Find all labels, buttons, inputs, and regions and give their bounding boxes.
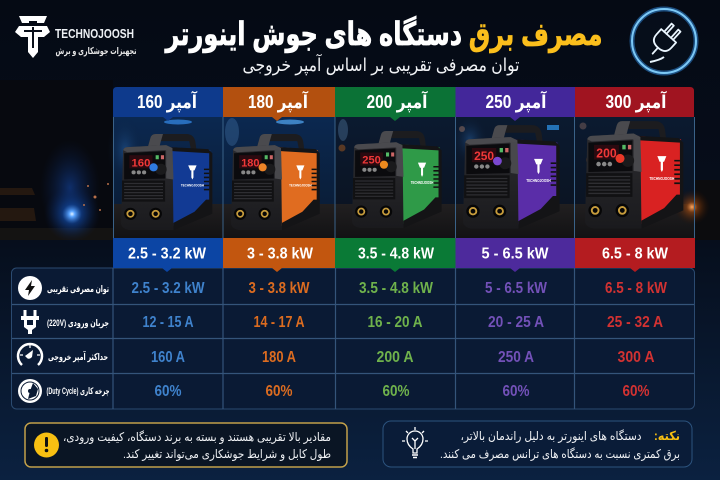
- values: 180 A: 180 A: [262, 349, 296, 366]
- values: 250 A: [485, 280, 548, 400]
- welder: 180 A orange: 180: [241, 157, 260, 169]
- row label: power: [18, 276, 109, 300]
- kW band: 160 A: [113, 238, 223, 272]
- welder: 200 A green: [352, 131, 442, 228]
- column header: 200: [335, 87, 456, 121]
- callout: note: برق کمتری نسبت به دستگاه های ترانس مصرف می کنند.: [440, 447, 680, 462]
- values: 250 A: 60%: [502, 383, 530, 400]
- logo: [15, 16, 136, 58]
- column header: 200: آمپر 200: [366, 90, 428, 113]
- title: مصرف برق دستگاه های جوش اینورتر: [164, 15, 602, 53]
- welder: 300 A red: 200: [596, 146, 617, 160]
- icon: plug badge: [632, 9, 696, 73]
- row label: power: توان مصرفی تقریبی: [47, 284, 109, 295]
- icon: gauge: [18, 344, 42, 365]
- kW band: 160 A: 2.5 - 3.2 kW: [128, 246, 206, 262]
- column header: 250: آمپر 250: [486, 90, 547, 113]
- values: 180 A: 60%: [266, 383, 292, 400]
- kW band: 250 A: 5 - 6.5 kW: [482, 246, 549, 262]
- values: 160 A: 2.5 - 3.2 kW: [132, 280, 205, 297]
- callout: warning: مقادیر بالا تقریبی هستند و بسته به برند دستگاه، کیفیت ورودی،: [63, 430, 331, 445]
- column header: 180: [223, 87, 335, 121]
- welder: 160 A blue: [121, 134, 212, 230]
- values: 250 A: 20 - 25 A: [488, 314, 544, 331]
- welder: 200 A green: TECHNOJOOSH: [411, 180, 433, 185]
- icon: plug: [21, 310, 39, 334]
- column header: 300: آمپر 300: [606, 90, 667, 113]
- kW band: 180 A: 3 - 3.8 kW: [247, 246, 313, 262]
- values: 200 A: [359, 280, 434, 400]
- callout: note: دستگاه های اینورتر به دلیل راندمان بالاتر،: [460, 429, 642, 444]
- brand tagline: تجهیزات جوشکاری و برش: [56, 46, 136, 57]
- welder: 250 A purple: TECHNOJOOSH: [526, 178, 551, 183]
- icon: light bulb: [402, 427, 428, 458]
- values: 300 A: 25 - 32 A: [607, 314, 663, 331]
- values: 160 A: 60%: [154, 383, 182, 400]
- icon: bolt: [18, 276, 42, 300]
- values: 160 A: [132, 280, 205, 400]
- values: 300 A: 6.5 - 8 kW: [605, 280, 668, 297]
- values: 160 A: 12 - 15 A: [142, 314, 194, 331]
- logo mark: [15, 16, 50, 58]
- column header: 300: [575, 87, 694, 117]
- kW band: 200 A: [335, 238, 456, 272]
- column header: 160: [113, 87, 223, 121]
- row label: input current: جریان ورودی (220V): [47, 318, 109, 329]
- callout: warning: [25, 423, 347, 467]
- kW band: 180 A: [223, 238, 335, 272]
- column header: 160: آمپر 160: [137, 90, 198, 113]
- welder: 250 A purple: [463, 125, 560, 229]
- row label: duty cycle: [18, 379, 110, 403]
- column header: 180: آمپر 180: [248, 90, 309, 113]
- values: 180 A: [248, 280, 310, 400]
- welder: 300 A red: TECHNOJOOSH: [649, 176, 674, 181]
- column header: 250: [456, 87, 575, 121]
- welder: 300 A red: [585, 121, 683, 228]
- kW band: 200 A: 3.5 - 4.8 kW: [358, 246, 434, 262]
- kW band: 300 A: 6.5 - 8 kW: [602, 246, 668, 262]
- row label: duty cycle: چرخه کاری (Duty Cycle): [46, 386, 110, 397]
- row label: max output: [18, 344, 108, 365]
- callout: note: [383, 421, 692, 467]
- callout: warning: طول کابل و شرایط جوشکاری می‌تواند تغییر کند.: [123, 447, 331, 462]
- kW band: 300 A: [575, 238, 695, 272]
- values: 300 A: 300 A: [618, 349, 655, 366]
- table: [12, 268, 694, 409]
- product scene: [107, 115, 710, 238]
- values: 300 A: 60%: [622, 383, 650, 400]
- values: 250 A: 5 - 6.5 kW: [485, 280, 548, 297]
- welder: 200 A green: 250: [362, 155, 381, 167]
- values: 300 A: [605, 280, 668, 400]
- welder: 180 A orange: TECHNOJOOSH: [289, 183, 312, 188]
- icon: duty cycle: [18, 379, 42, 403]
- values: 250 A: 250 A: [498, 349, 534, 366]
- icon: exclamation: [34, 432, 59, 458]
- values: 180 A: 14 - 17 A: [254, 314, 305, 331]
- welder: 250 A purple: 250: [474, 149, 494, 163]
- subtitle: توان مصرفی تقریبی بر اساس آمپر خروجی: [242, 53, 520, 76]
- values: 200 A: 60%: [382, 383, 410, 400]
- row label: input current: [21, 310, 109, 334]
- values: 200 A: 3.5 - 4.8 kW: [359, 280, 434, 297]
- values: 160 A: 160 A: [151, 349, 185, 366]
- brand name: TECHNOJOOSH: [55, 27, 134, 41]
- row label: max output: حداکثر آمپر خروجی: [48, 350, 108, 363]
- note label: نکته:: [654, 429, 680, 443]
- welder: 180 A orange: [231, 134, 320, 230]
- values: 180 A: 3 - 3.8 kW: [248, 280, 310, 297]
- welder: 160 A blue: TECHNOJOOSH: [181, 183, 204, 188]
- values: 200 A: 16 - 20 A: [368, 314, 423, 331]
- welder: 160 A blue: 160: [131, 158, 150, 169]
- kW band: 250 A: [456, 238, 575, 272]
- values: 200 A: 200 A: [376, 349, 414, 366]
